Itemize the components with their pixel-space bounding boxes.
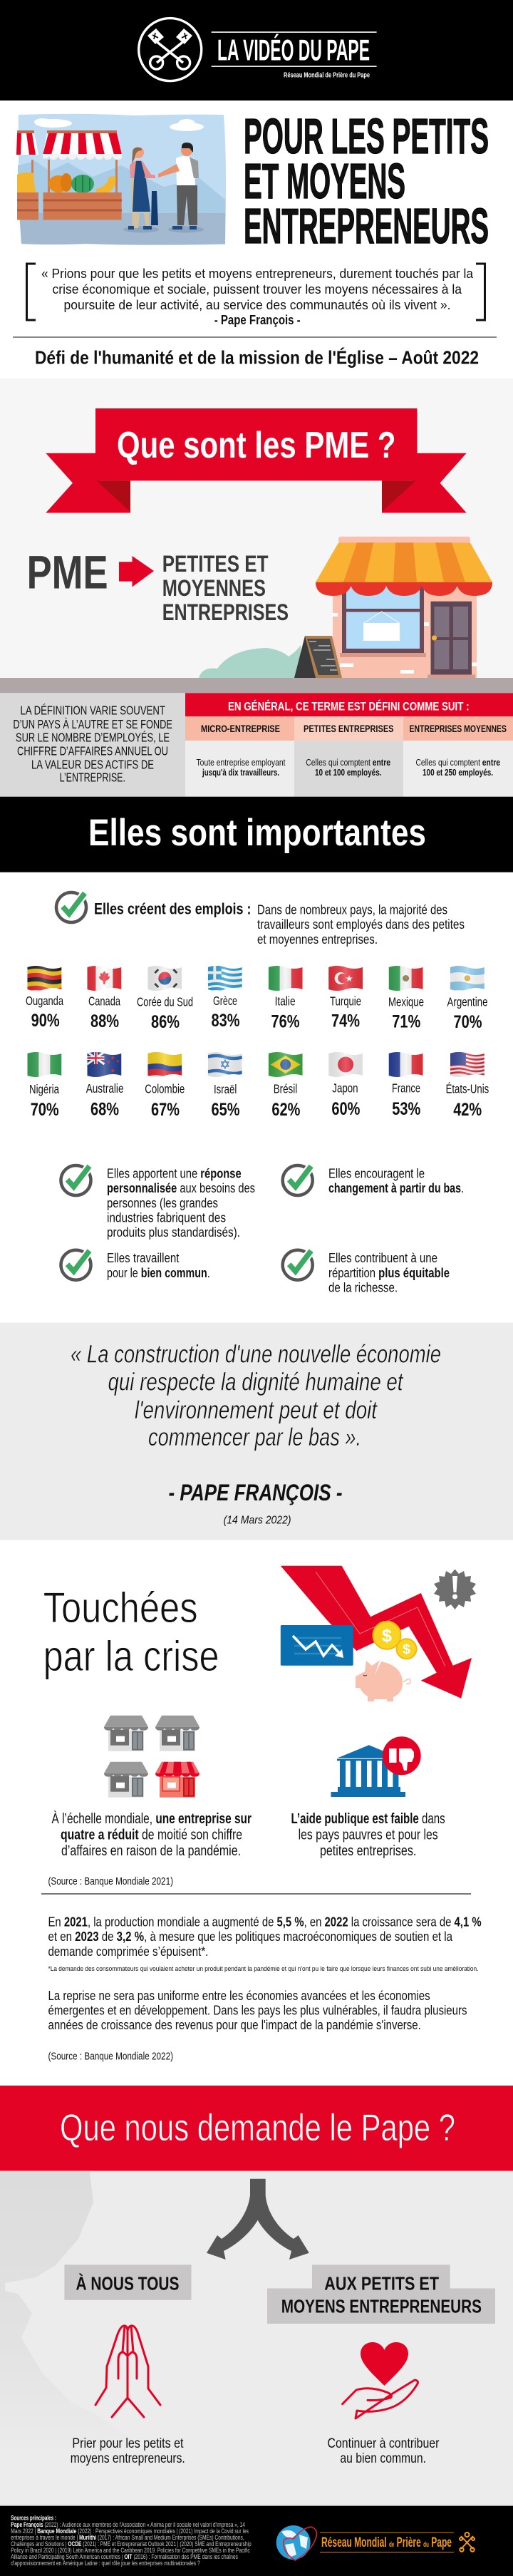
sources: entreprises à travers le monde | Muriithi (2017) : African Small and Medium Enterprises (SMEs) Contributions, [11,2534,244,2541]
crisis heading: Touchées [43,1584,198,1632]
benefit: equitable distribution: Elles contribuent à une [328,1251,437,1265]
text: pray [71,2436,185,2466]
flag: Corée du Sud: 86% [151,1012,180,1032]
flag: Nigéria [27,1052,61,1120]
flag: Brésil: Brésil [274,1081,297,1096]
growth text: et en 2023 de 3,2 %, à mesure que les politiques macroéconomiques de soutien et la [48,1930,453,1944]
prayer quote: crise économique et sociale, puissent trouver les moyens nécessaires à la [53,282,462,297]
jobs description: travailleurs sont employés dans des petites [257,917,465,932]
icon: heart in hand [343,2342,418,2418]
flag: Canada [87,966,121,1031]
flag: Japon: Japon [332,1081,358,1096]
heading band: que nous demande le Pape [0,2086,513,2171]
flag: Colombie [145,1052,185,1120]
flag: Nigéria: Nigéria [29,1082,59,1096]
growth text [48,1915,482,1959]
recovery text: La reprise ne sera pas uniforme entre les économies avancées et les économies [48,1989,430,2003]
text: pray: moyens entrepreneurs. [71,2451,185,2466]
crisis text right: les pays pauvres et pour les [299,1828,438,1843]
benefit: common good: pour le bien commun. [107,1266,210,1280]
flag: France: France [392,1081,420,1095]
benefit: change from below [283,1165,464,1195]
crisis text right: petites entreprises. [320,1843,416,1859]
flag: Corée du Sud: Corée du Sud [137,995,193,1009]
sources: Challenges and Solutions | OCDE (2021) : PME et Entreprenariat Outlook 2021 | (2020) SME and Entrepreneurship [11,2540,252,2547]
sources: Alliance and Participating South American countries | OIT (2016) : Formalisation des PME dans les chaînes [11,2553,238,2560]
flag: Italie: 76% [271,1012,299,1032]
quote text: l'environnement peut et doit [135,1396,378,1424]
flag: Ouganda [26,966,63,1031]
table: company sizes: Toute entreprise employant [197,758,286,768]
sources [11,2515,252,2567]
main heading [244,108,489,254]
icon: check [56,892,86,922]
definition text: SUR LE NOMBRE D’EMPLOYÉS, LE [16,731,170,745]
growth text: demande comprimée s’épuisent*. [48,1944,208,1959]
label: aux petits et moyens entrepreneurs [267,2265,495,2324]
benefit: equitable distribution: répartition plus équitable [328,1266,450,1280]
crisis text right: L’aide publique est faible dans [291,1811,445,1827]
label: à nous tous: À NOUS TOUS [76,2273,180,2294]
flag: Mexique: 71% [392,1012,420,1032]
definition text [13,704,172,785]
crisis heading [43,1584,219,1680]
benefit: personalised response: produits plus standardisés). [107,1225,240,1240]
ribbon heading: Que sont les PME ? [117,425,396,466]
coins: $ [382,1626,392,1646]
illustration: shop [199,537,492,678]
source 2021: (Source : Banque Mondiale 2021) [48,1875,173,1887]
table: company sizes: MICRO-ENTREPRISE [201,723,280,734]
flag: Argentine: Argentine [447,995,487,1009]
sources: Sources principales : [11,2515,56,2522]
flag: Mexique [388,966,424,1032]
arrow: split in two [207,2179,309,2260]
text: pray: Prier pour les petits et [72,2436,184,2451]
crisis text left: quatre a réduit de moitié son chiffre [61,1828,242,1843]
source 2022: (Source : Banque Mondiale 2022) [48,2050,173,2062]
flag: France: 53% [392,1099,420,1119]
pope silhouette [0,2171,135,2456]
table: company sizes: Celles qui comptent entre [416,758,500,768]
flag: Nigéria: 70% [31,1100,59,1120]
flag: Israël: Israël [214,1082,237,1096]
icon: globe with heart [276,2525,316,2560]
flag: Turquie: Turquie [330,994,361,1009]
flag: Italie [269,966,303,1032]
ground strip [0,678,513,693]
definition text: LA VALEUR DES ACTIFS DE [31,757,154,771]
table: company sizes: jusqu'à dix travailleurs. [202,768,279,778]
icon: shops one in four [104,1716,200,1798]
flag: Japon: 60% [331,1099,360,1119]
crisis text left: À l’échelle mondiale, une entreprise sur [51,1810,252,1827]
flag: Grèce [208,966,242,1026]
flag: Corée du Sud [137,966,193,1032]
flag: Ouganda: Ouganda [26,994,63,1008]
flag: Ouganda: 90% [31,1011,60,1031]
jobs description: et moyennes entreprises. [257,932,378,947]
flag: Turquie: 74% [331,1011,360,1031]
label: aux petits et moyens entrepreneurs: AUX PETITS ET [324,2273,439,2294]
icon: crossed keys logo [139,19,202,81]
quote text: commencer par le bas ». [148,1423,361,1451]
table: company sizes: PETITES ENTREPRISES [304,723,393,734]
benefit: change from below: Elles encouragent le [328,1167,425,1181]
text: contribute: au bien commun. [340,2451,426,2466]
text: contribute [328,2436,440,2466]
jobs description: Dans de nombreux pays, la majorité des [257,903,447,917]
PME definition [27,546,289,625]
flag: États-Unis: 42% [453,1100,482,1120]
alert badge [434,1570,476,1609]
panel: que sont les PME [0,378,513,694]
benefit: common good [61,1250,210,1280]
PME definition: MOYENNES [162,575,266,601]
illustration: falling arrow [281,1566,476,1701]
flag: Brésil: 62% [271,1100,300,1120]
heading band: elles sont importantes: Elles sont importantes [88,812,426,854]
flag: Argentine [447,966,487,1032]
flag: Mexique: Mexique [388,994,424,1009]
flag: États-Unis [446,1052,489,1120]
table: company sizes: 10 et 100 employés. [315,768,382,778]
panel: definition [0,693,513,797]
flag: Grèce: 83% [211,1011,239,1031]
jobs heading: Elles créent des emplois : [94,900,251,918]
illustration: market stall handshake [16,114,226,245]
label: à nous tous [64,2265,192,2300]
flag: Australie: Australie [86,1081,124,1096]
crisis text left: d’affaires en raison de la pandémie. [61,1843,241,1859]
panel: jobs created [56,892,465,947]
prayer quote: « Prions pour que les petits et moyens entrepreneurs, durement touchés par la [41,266,474,281]
recovery text [48,1989,467,2032]
flag: Colombie: Colombie [145,1081,185,1096]
crisis text right [291,1811,445,1859]
quote text [71,1341,441,1451]
panel: benefits list [61,1165,464,1295]
panel: what the Pope asks [0,2171,513,2506]
flag: Canada: 88% [90,1011,119,1031]
flags row 1 [26,966,487,1032]
prayer quote: - Pape François - [214,312,301,327]
definition text: L’ENTREPRISE. [60,771,125,785]
coins [373,1622,416,1659]
text: contribute: Continuer à contribuer [328,2436,440,2451]
flag: Australie: 68% [90,1099,119,1119]
flag: Australie [86,1052,124,1119]
PME definition: ENTREPRISES [162,599,289,625]
recovery text: années de croissance des revenus pour que l'impact de la pandémie s'inverse. [48,2018,421,2032]
jobs description [257,903,465,947]
panel: crisis [41,1566,482,2062]
PME definition: PME [27,546,108,599]
benefit: personalised response [61,1165,255,1240]
flag: Israël: 65% [211,1100,239,1120]
piggy bank [356,1660,410,1701]
panel: title area [13,108,497,368]
logo title: LA VIDÉO DU PAPE [217,33,370,66]
flag: Italie: Italie [275,994,296,1009]
flag: Canada: Canada [88,994,120,1009]
table: company sizes [185,693,513,797]
benefit: equitable distribution: de la richesse. [328,1281,398,1295]
network name: Réseau Mondial de Prière du Pape [321,2535,452,2550]
icon: bank with thumb down [331,1736,421,1797]
benefit: personalised response: personnes (les grandes [107,1196,218,1210]
benefit: common good: Elles travaillent [107,1251,180,1265]
PME definition: PETITES ET [162,551,269,577]
growth text: En 2021, la production mondiale a augmenté de 5,5 %, en 2022 la croissance sera de 4,1 % [48,1915,482,1930]
flag: Israël [208,1052,242,1116]
icon: praying hands [95,2326,160,2417]
benefit: equitable distribution [283,1250,450,1295]
benefit: personalised response: industries fabriquent des [107,1211,226,1225]
prayer quote [27,264,484,327]
blue chart card [281,1625,353,1666]
header band [0,0,513,101]
flag: Japon [328,1052,363,1119]
flag: États-Unis: États-Unis [446,1081,489,1096]
flag: Colombie: 67% [151,1100,180,1120]
benefit: change from below: changement à partir du bas. [328,1181,464,1195]
flag: France [389,1052,423,1119]
flag: Turquie [328,966,363,1031]
logo title [212,31,377,79]
footer [0,2505,513,2576]
table: company sizes: 100 et 250 employés. [423,768,493,778]
panel: pope quote [0,1323,513,1540]
definition text: LA DÉFINITION VARIE SOUVENT [20,704,165,718]
quote author: - PAPE FRANÇOIS - [168,1480,342,1505]
benefit: personalised response: personnalisée aux besoins des [107,1181,255,1195]
sources: Pape François (2022) : Audience aux membres de l'Association « Anima per il sociale nei valori d'impresa », 14 [11,2521,245,2528]
crisis heading: par la crise [43,1632,219,1680]
heading band: elles sont importantes [0,797,513,872]
flag: Brésil [269,1052,303,1120]
prayer quote: poursuite de leur activité, au service des communautés où ils vivent ». [64,297,450,312]
sources: d'approvisionnement en Amérique Latine : quel rôle joue les entreprises multinationales ? [11,2560,200,2567]
crisis text left [51,1810,252,1859]
flags row 2 [27,1052,489,1120]
flag: Argentine: 70% [453,1012,482,1032]
sources: Mars 2022 | Banque Mondiale (2022) : Perspectives économiques mondiales | (2021) Impact de la Covid sur les [11,2528,249,2535]
ribbon heading [46,408,467,513]
definition text: D’UN PAYS À L’AUTRE ET SE FONDE [13,717,172,731]
logo title: Réseau Mondial de Prière du Pape [284,71,370,80]
sources: Policy in Brazil 2020 | (2019) Latin America and the Caribbean 2019. Policies for Competitive SMEs in the Pacific [11,2547,250,2554]
icon: orange keys [460,2533,475,2552]
coins: $ [403,1642,410,1657]
quote date: (14 Mars 2022) [224,1515,291,1527]
quote text: qui respecte la dignité humaine et [108,1369,403,1396]
table: company sizes: Celles qui comptent entre [306,758,390,768]
flag: Grèce: Grèce [213,994,237,1008]
benefit: personalised response: Elles apportent une réponse [107,1167,242,1181]
arrow [119,556,154,587]
definition text: CHIFFRE D’AFFAIRES ANNUEL OU [17,744,168,758]
